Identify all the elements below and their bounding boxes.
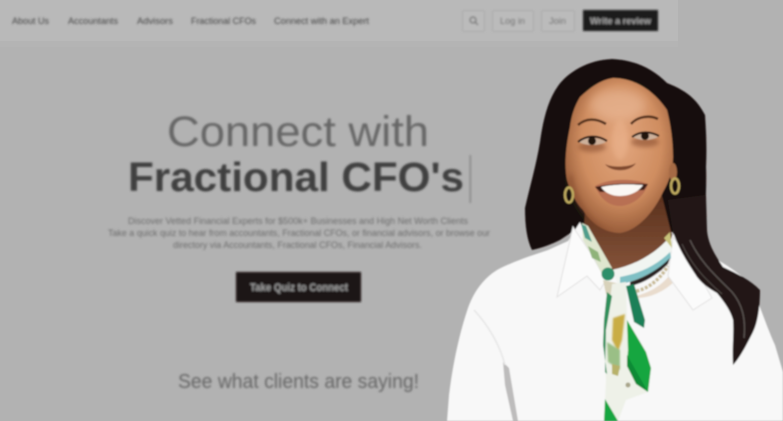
scarf left band bbox=[582, 223, 612, 278]
ears and earrings bbox=[565, 163, 679, 202]
nose bbox=[605, 163, 636, 170]
forehead highlight bbox=[590, 89, 646, 121]
mouth bbox=[595, 180, 648, 206]
long hair strand bbox=[668, 195, 760, 365]
eyebrows bbox=[578, 120, 606, 125]
headline bbox=[128, 108, 471, 203]
scarf bottom green bbox=[604, 399, 618, 421]
headline: Connect with bbox=[167, 108, 429, 156]
navigation bar bbox=[0, 0, 678, 47]
nav links: About Us bbox=[12, 16, 49, 26]
nav buttons: Join bbox=[549, 16, 566, 26]
scarf long tail bbox=[604, 282, 648, 421]
typing cursor bbox=[470, 155, 471, 203]
headline: Fractional CFO's bbox=[128, 154, 464, 200]
nav links: Accountants bbox=[68, 16, 119, 26]
nav links bbox=[12, 16, 369, 26]
neck bbox=[584, 196, 672, 284]
description text: Discover Vetted Financial Experts for $500k+ Businesses and High Net Worth Clients bbox=[128, 216, 468, 227]
shirt collar right bbox=[668, 237, 712, 310]
shirt bbox=[447, 222, 783, 421]
necklace bbox=[632, 266, 668, 292]
testimonials heading: See what clients are saying! bbox=[178, 371, 419, 393]
nav links: Advisors bbox=[137, 16, 174, 26]
call to action button bbox=[236, 272, 361, 302]
scarf bbox=[581, 223, 672, 421]
photo: smiling woman bbox=[447, 59, 783, 421]
cheek shadow bbox=[568, 172, 612, 232]
nav buttons: Log in bbox=[500, 16, 525, 26]
call to action button: Take Quiz to Connect bbox=[250, 282, 348, 294]
shirt collar left bbox=[557, 227, 606, 297]
scarf knot bbox=[602, 268, 614, 280]
scarf dark tail bbox=[626, 284, 645, 328]
sleeve fold shadow bbox=[503, 362, 518, 421]
back hair bbox=[525, 59, 707, 250]
face bbox=[566, 78, 673, 233]
scarf green panel bbox=[627, 320, 651, 392]
nav buttons: Write a review bbox=[590, 16, 652, 26]
nav links: Fractional CFOs bbox=[191, 16, 256, 26]
nav links: Connect with an Expert bbox=[274, 16, 369, 26]
eyes bbox=[578, 132, 659, 152]
description text: Take a quick quiz to hear from accountants, Fractional CFOs, or financial advisors, or browse our bbox=[108, 228, 490, 239]
description text bbox=[108, 216, 490, 251]
scarf right band bbox=[612, 240, 672, 284]
description text: directory via Accountants, Fractional CFOs, Financial Advisors. bbox=[173, 240, 422, 251]
nav buttons bbox=[462, 10, 658, 32]
